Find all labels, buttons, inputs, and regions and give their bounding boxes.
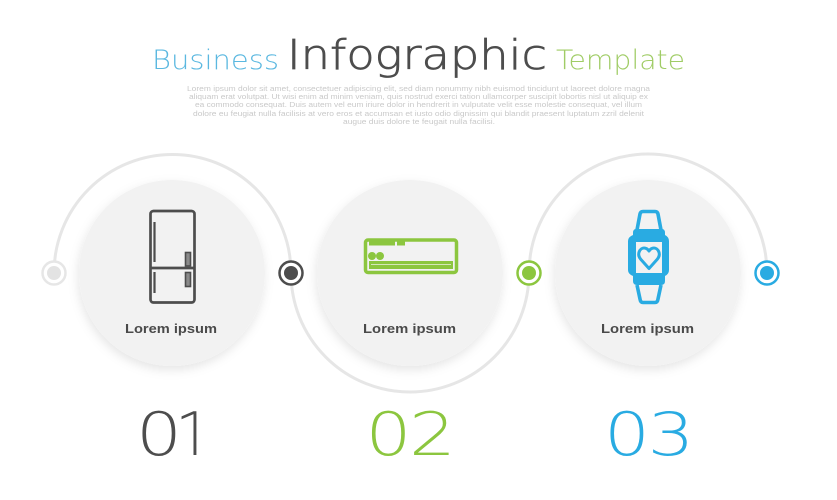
number 01: [142, 410, 196, 456]
infographic canvas: [41, 38, 780, 456]
connecting arcs: [54, 154, 767, 392]
node: step 1 start: [42, 262, 66, 284]
number 03: 0: [604, 400, 650, 470]
label: Lorem ipsum: [363, 321, 456, 336]
number 03: [604, 400, 694, 470]
number 01: 1: [175, 400, 213, 474]
description text block: Lorem ipsum dolor sit amet, consectetuer adipiscing elit, sed diam nonummy nibh euismod tincidunt ut laoreet dolore magna: [187, 84, 651, 93]
description text block: augue duis dolore te feugait nulla facilisi.: [343, 117, 495, 126]
node: step 1 end: [280, 262, 302, 284]
title: Infographic: [287, 31, 547, 79]
panel: step 2: [317, 180, 503, 366]
title: [152, 31, 685, 79]
icon: air conditioner: [366, 240, 456, 272]
node: step 3 end: [756, 262, 778, 284]
number 02: 0: [366, 400, 412, 470]
icon: smart watch with heart: [628, 212, 669, 302]
panel: step 1: [79, 180, 265, 366]
description text block: dolore eu feugiat nulla facilisis at vero eros et accumsan et iusto odio dignissim qui blandit praesent luptatum zzril delenit: [193, 109, 644, 118]
description text block: [187, 84, 651, 126]
node: step 2 end: [518, 262, 540, 284]
number 03: 3: [648, 400, 694, 470]
description text block: aliquam erat volutpat. Ut wisi enim ad minim veniam, quis nostrud exerci tation ullamcorper suscipit lobortis nisl ut aliquip ex: [189, 92, 648, 101]
title: Template: [556, 45, 685, 76]
number 02: 2: [409, 400, 456, 470]
title: Business: [152, 45, 279, 76]
icon: refrigerator: [150, 211, 194, 302]
panel: step 3: [555, 180, 741, 366]
number 02: [366, 400, 456, 470]
label: Lorem ipsum: [125, 321, 217, 336]
label: Lorem ipsum: [601, 321, 694, 336]
number 01: 0: [136, 400, 182, 470]
description text block: ea commodo consequat. Duis autem vel eum iriure dolor in hendrerit in vulputate velit esse molestie consequat, vel illum: [195, 100, 642, 109]
